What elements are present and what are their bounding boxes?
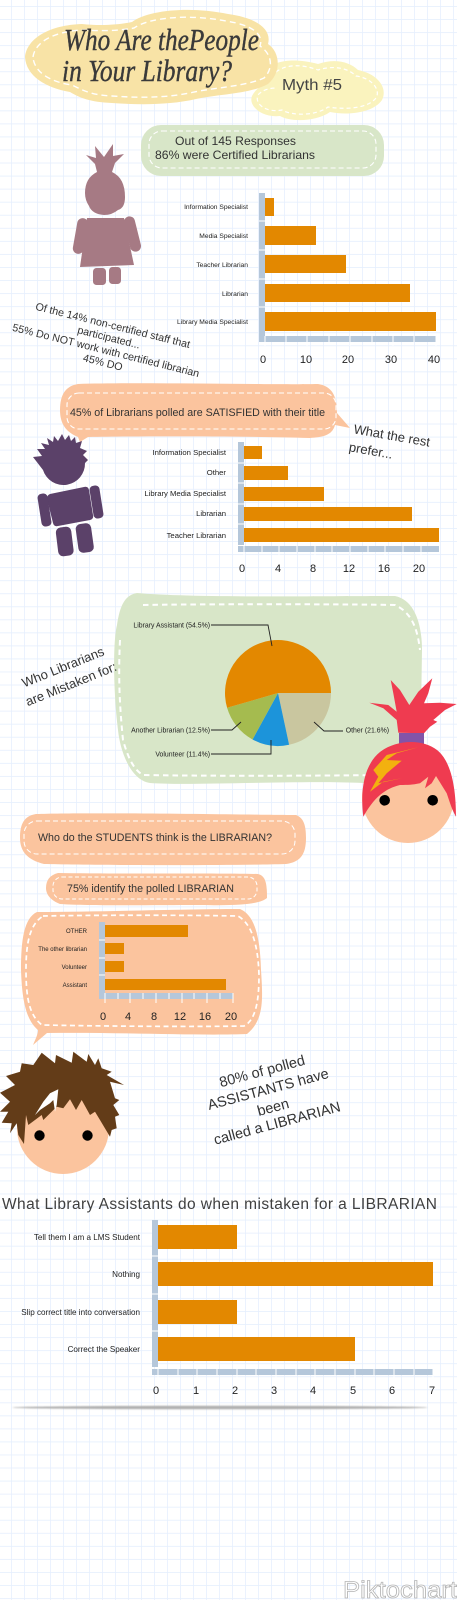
- bar chart: assistant responses: 7: [429, 1385, 435, 1397]
- pie chart: Other (21.6%): [346, 728, 389, 734]
- responses text: Out of 145 Responses: [175, 134, 296, 148]
- bar chart: preferred titles: [144, 442, 439, 575]
- bar chart: assistant responses: 6: [389, 1385, 395, 1397]
- bar chart: student guesses: 20: [225, 1011, 237, 1023]
- note: 80 percent of assistants: ASSISTANTS have: [206, 1066, 331, 1114]
- bar chart: preferred titles: 20: [413, 563, 425, 575]
- note: non-certified staff: 45% DO: [82, 352, 124, 374]
- bar chart: certified titles: Media Specialist: [199, 233, 248, 240]
- bar chart: assistant responses: [21, 1220, 435, 1397]
- bar chart: assistant responses: 4: [310, 1385, 316, 1397]
- bar chart: student guesses: 4: [125, 1011, 131, 1023]
- bar chart: student guesses: Volunteer: [62, 965, 87, 971]
- bar chart: preferred titles: Information Specialist: [152, 448, 227, 457]
- satisfied text: 45% of Librarians polled are SATISFIED with their title: [70, 407, 325, 419]
- bar chart: assistant responses: 0: [153, 1385, 159, 1397]
- heading: library assistants: What Library Assistants do when mistaken for a LIBRARIAN: [2, 1196, 437, 1213]
- bar chart: assistant responses: Correct the Speaker: [68, 1345, 140, 1354]
- bar chart: student guesses: 16: [199, 1011, 211, 1023]
- note: 80 percent of assistants: called a LIBRARIAN: [212, 1099, 342, 1149]
- bar chart: preferred titles: Teacher Librarian: [167, 531, 226, 540]
- bar chart: assistant responses: 5: [350, 1385, 356, 1397]
- note: 80 percent of assistants: [206, 1053, 342, 1149]
- bar chart: student guesses: 12: [174, 1011, 186, 1023]
- icon: brown-haired boy: [0, 1052, 124, 1174]
- bar chart: preferred titles: 0: [239, 563, 245, 575]
- note: what the rest prefer: What the rest: [353, 421, 432, 450]
- bar chart: certified titles: Librarian: [222, 291, 248, 298]
- bar chart: assistant responses: 1: [193, 1385, 199, 1397]
- bar chart: assistant responses: Slip correct title into conversation: [21, 1308, 140, 1317]
- bar chart: student guesses: Assistant: [63, 983, 87, 989]
- pie chart: Volunteer (11.4%): [155, 752, 210, 758]
- callout: 75 percent: [46, 873, 267, 905]
- bar chart: preferred titles: Librarian: [196, 509, 226, 518]
- title text: in Your Library?: [62, 53, 232, 88]
- bar chart: assistant responses: 3: [271, 1385, 277, 1397]
- 75 percent text: 75% identify the polled LIBRARIAN: [67, 883, 234, 895]
- bar chart: certified titles: 40: [428, 354, 440, 366]
- note: what the rest prefer: prefer...: [348, 439, 394, 462]
- note: who librarians are mistaken for: Who Librarians: [20, 643, 107, 690]
- bar chart: certified titles: 0: [260, 354, 266, 366]
- responses text: [155, 134, 315, 162]
- callout: responses: [141, 125, 384, 176]
- bar chart: certified titles: Library Media Specialist: [177, 319, 248, 326]
- icon: red-haired girl: [362, 678, 457, 843]
- bar chart: certified titles: Teacher Librarian: [196, 262, 248, 269]
- bar chart: certified titles: Information Specialist: [184, 204, 248, 211]
- bar chart: assistant responses: 2: [232, 1385, 238, 1397]
- bar chart: assistant responses: Tell them I am a LMS Student: [34, 1233, 141, 1242]
- note: what the rest prefer: [348, 421, 432, 462]
- note: 80 percent of assistants: been: [256, 1096, 291, 1120]
- title text: Who Are thePeople: [64, 22, 259, 57]
- title text: [62, 22, 259, 88]
- note: who librarians are mistaken for: are Mistaken for:: [23, 659, 119, 709]
- bar chart: certified titles: 30: [385, 354, 397, 366]
- bar chart: certified titles: [177, 193, 440, 366]
- bar chart: preferred titles: 8: [310, 563, 316, 575]
- bar chart: preferred titles: Library Media Specialist: [144, 489, 227, 498]
- bar chart: student guesses: OTHER: [66, 929, 88, 935]
- divider shadow: [12, 1406, 428, 1409]
- bar chart: preferred titles: 4: [275, 563, 281, 575]
- bar chart: student guesses: 0: [100, 1011, 106, 1023]
- callout: satisfied: [60, 383, 350, 442]
- pie chart: Another Librarian (12.5%): [131, 728, 210, 734]
- note: non-certified staff: participated...: [76, 324, 141, 352]
- pie chart: Library Assistant (54.5%): [133, 622, 210, 630]
- bar chart: student guesses: [38, 922, 237, 1023]
- bar chart: preferred titles: 12: [343, 563, 355, 575]
- bar chart: preferred titles: 16: [378, 563, 390, 575]
- bar chart: student guesses: The other librarian: [38, 947, 87, 953]
- myth cloud: [251, 61, 384, 120]
- icon: woman figure: [72, 144, 142, 285]
- bar chart: preferred titles: Other: [207, 468, 226, 477]
- note: non-certified staff: Of the 14% non-certified staff that: [34, 301, 191, 351]
- callout: students question: [20, 813, 306, 865]
- icon: purple boy figure: [33, 434, 104, 557]
- responses text: 86% were Certified Librarians: [155, 148, 315, 162]
- bar chart: certified titles: 20: [342, 354, 354, 366]
- bar chart: assistant responses: Nothing: [112, 1270, 140, 1279]
- bar chart: student guesses: 8: [151, 1011, 157, 1023]
- panel: mistaken-for pie: [114, 593, 422, 784]
- bar chart: certified titles: 10: [300, 354, 312, 366]
- title cloud: [25, 10, 278, 104]
- pie chart: [131, 622, 389, 758]
- myth label: Myth #5: [282, 77, 342, 94]
- panel: student guesses chart: [21, 909, 262, 1045]
- students question text: Who do the STUDENTS think is the LIBRARIAN?: [38, 832, 272, 844]
- note: non-certified staff: 55% Do NOT work with certified librarian: [11, 322, 201, 380]
- note: 80 percent of assistants: 80% of polled: [218, 1053, 307, 1091]
